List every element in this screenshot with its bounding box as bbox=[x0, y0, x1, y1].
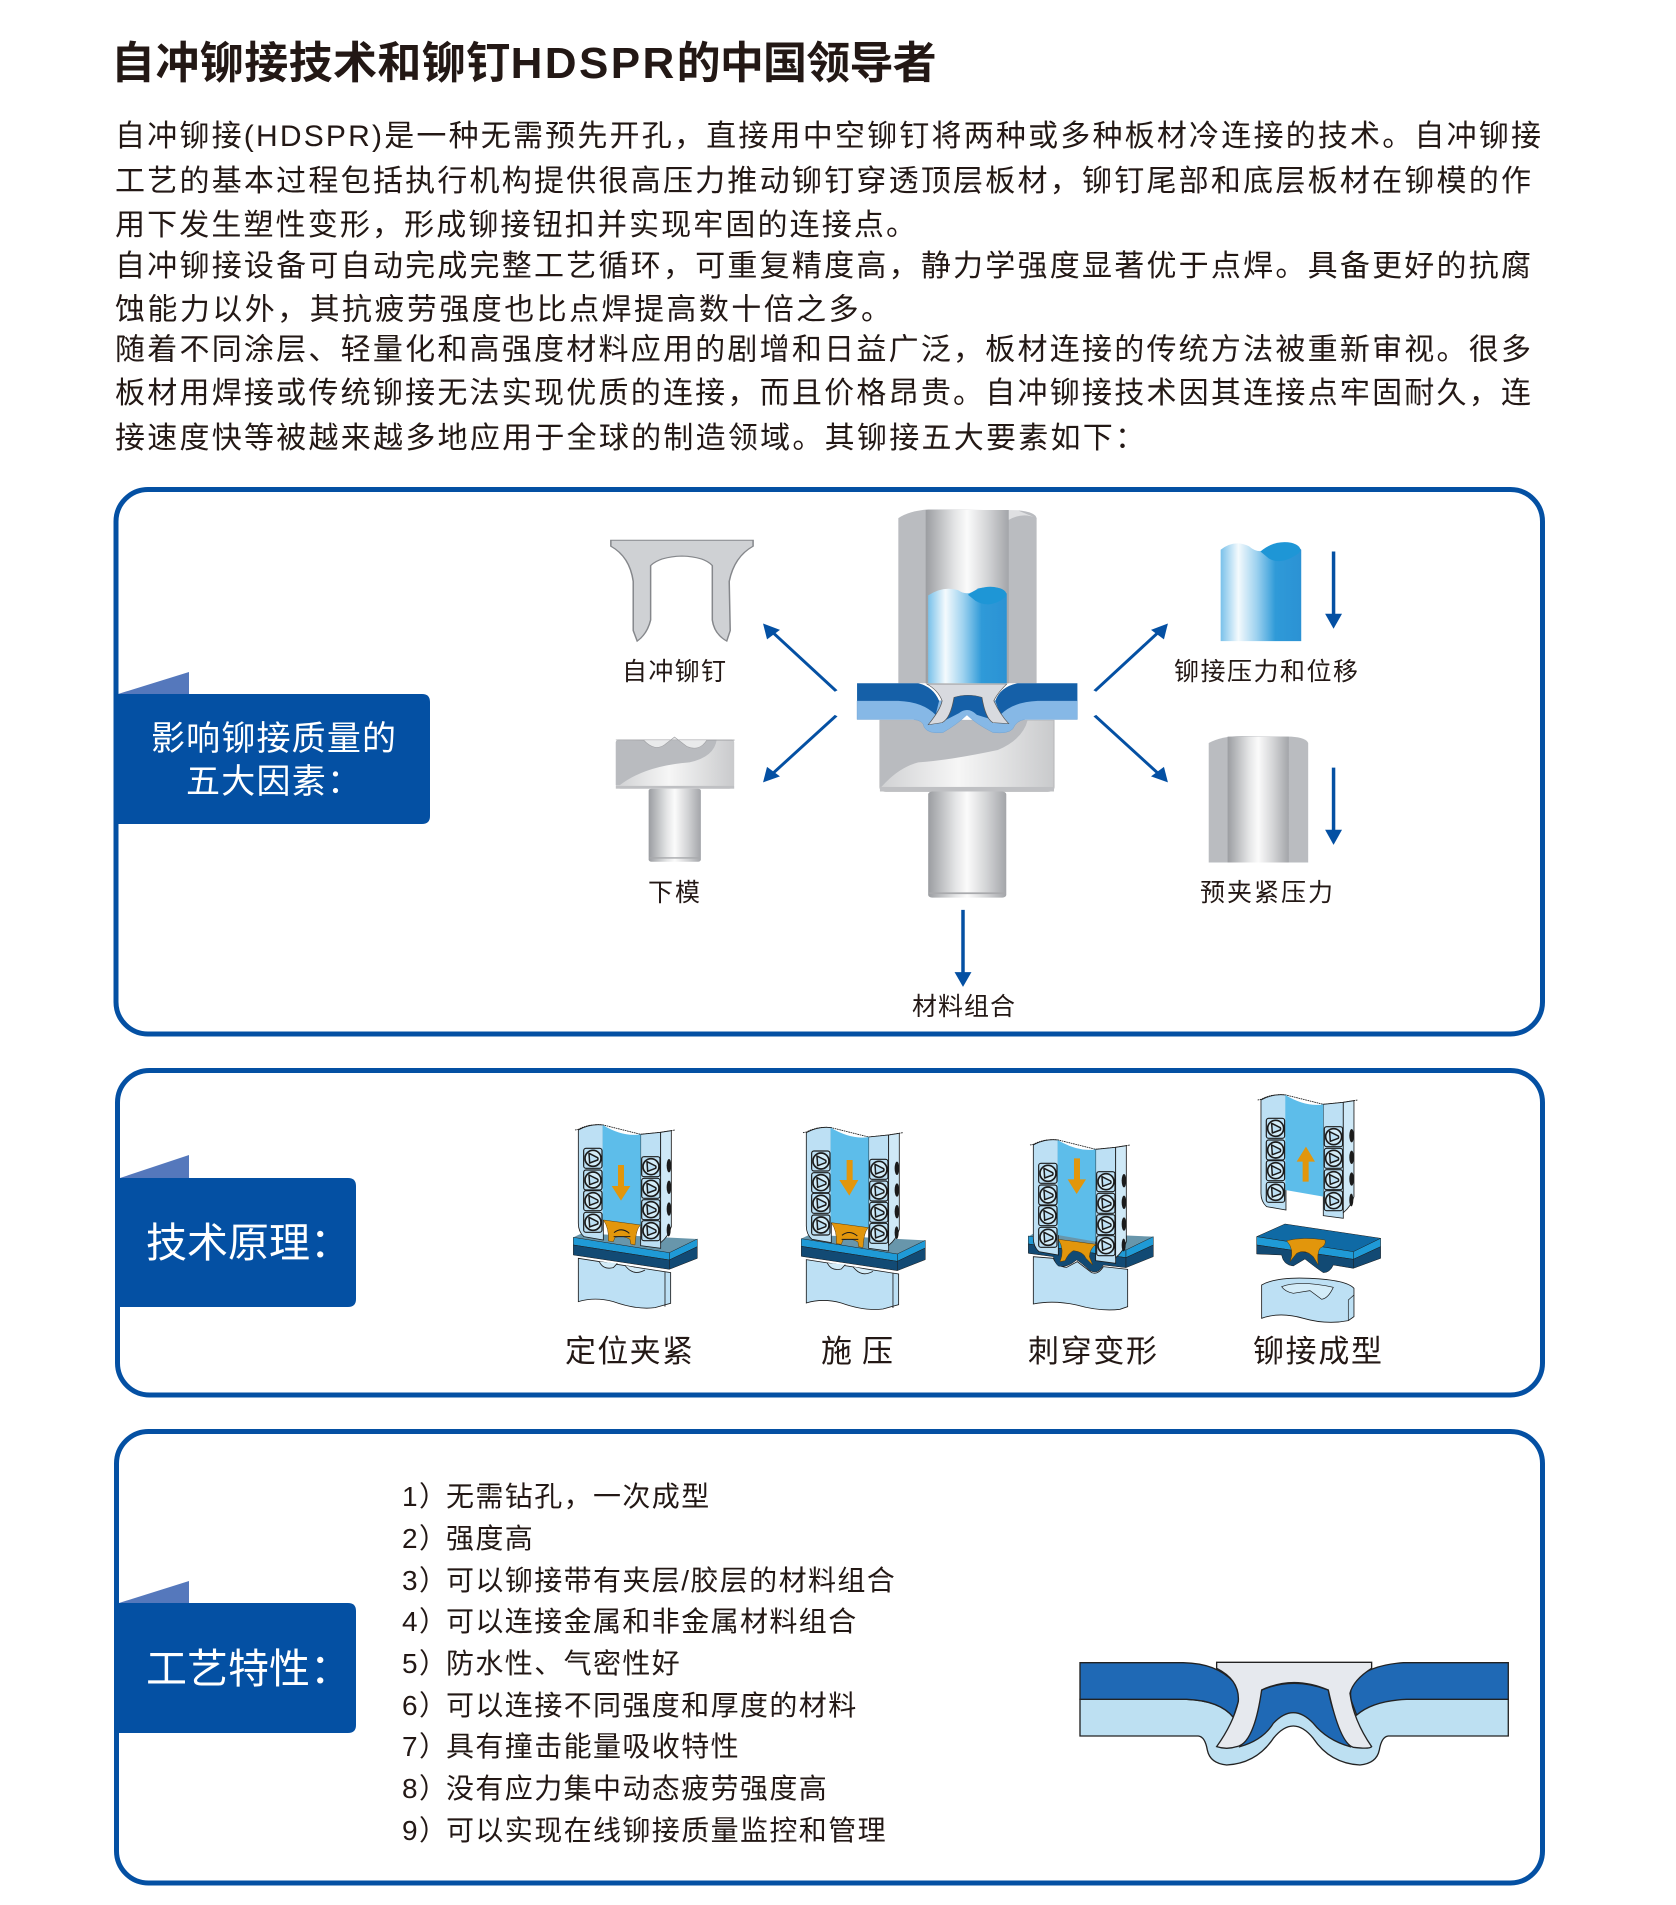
feature list: 4） bbox=[402, 1606, 448, 1637]
feature list: 可以铆接带有夹层/胶层的材料组合 bbox=[446, 1565, 896, 1596]
central riveting diagram bbox=[857, 509, 1077, 898]
icon: lower die bbox=[616, 737, 734, 862]
intro text block: 用下发生塑性变形，形成铆接钮扣并实现牢固的连接点。 bbox=[115, 209, 916, 242]
intro text block: 工艺的基本过程包括执行机构提供很高压力推动铆钉穿透顶层板材，铆钉尾部和底层板材在铆模的作 bbox=[115, 165, 1531, 198]
intro text block: 蚀能力以外，其抗疲劳强度也比点焊提高数十倍之多。 bbox=[115, 294, 891, 326]
intro text block: 接速度快等被越来越多地应用于全球的制造领域。其铆接五大要素如下： bbox=[115, 422, 1145, 455]
title: 自冲铆接技术和铆钉HDSPR的中国领导者 bbox=[111, 39, 936, 88]
feature list: 可以实现在线铆接质量监控和管理 bbox=[446, 1815, 887, 1846]
feature list: 3） bbox=[402, 1565, 448, 1596]
rivet joint cross-section bbox=[1080, 1662, 1508, 1765]
intro text block: 板材用焊接或传统铆接无法实现优质的连接，而且价格昂贵。自冲铆接技术因其连接点牢固耐久，连 bbox=[115, 377, 1531, 410]
icon: clamp tube with force arrow bbox=[1209, 736, 1342, 862]
intro text block: 自冲铆接设备可自动完成完整工艺循环，可重复精度高，静力学强度显著优于点焊。具备更好的抗腐 bbox=[115, 250, 1531, 283]
feature list: 无需钻孔，一次成型 bbox=[446, 1481, 711, 1512]
feature list: 7） bbox=[402, 1731, 448, 1762]
label: stage 3: 刺穿变形 bbox=[1028, 1334, 1157, 1369]
label: stage 4: 铆接成型 bbox=[1253, 1334, 1382, 1369]
feature list: 具有撞击能量吸收特性 bbox=[446, 1731, 740, 1762]
label: stage 1: 定位夹紧 bbox=[565, 1334, 693, 1369]
stage 2: applying pressure bbox=[801, 1127, 925, 1309]
feature list bbox=[402, 1481, 896, 1846]
banner: process characteristics: 工艺特性： bbox=[146, 1646, 351, 1692]
stage 3: piercing and deforming bbox=[1028, 1140, 1153, 1310]
label: stage 2: 施 压 bbox=[821, 1334, 893, 1369]
banner: five factors bbox=[114, 672, 430, 824]
feature list: 强度高 bbox=[446, 1523, 534, 1554]
feature list: 可以连接不同强度和厚度的材料 bbox=[446, 1690, 858, 1721]
feature list: 8） bbox=[402, 1773, 448, 1804]
feature list: 9） bbox=[402, 1815, 448, 1846]
icon: punch with force arrow bbox=[1221, 542, 1342, 641]
feature list: 5） bbox=[402, 1648, 448, 1679]
intro text block bbox=[115, 120, 1541, 455]
feature list: 没有应力集中动态疲劳强度高 bbox=[446, 1773, 828, 1804]
feature list: 6） bbox=[402, 1690, 448, 1721]
intro text block: 随着不同涂层、轻量化和高强度材料应用的剧增和日益广泛，板材连接的传统方法被重新审视。很多 bbox=[115, 334, 1531, 366]
panel: technical principle bbox=[117, 1070, 1542, 1395]
intro text block: 自冲铆接(HDSPR)是一种无需预先开孔，直接用中空铆钉将两种或多种板材冷连接的技术。自冲铆接 bbox=[115, 120, 1541, 153]
banner: five factors: 影响铆接质量的 bbox=[151, 720, 396, 758]
label: force and displacement: 铆接压力和位移 bbox=[1174, 658, 1358, 686]
banner: technical principle: 技术原理： bbox=[146, 1220, 351, 1266]
feature list: 1） bbox=[402, 1481, 448, 1512]
label: clamping force: 预夹紧压力 bbox=[1200, 879, 1333, 907]
banner: process characteristics bbox=[114, 1581, 356, 1733]
arrows radiating from centre bbox=[763, 624, 1168, 987]
stage 1: positioning and clamping bbox=[573, 1125, 697, 1308]
label: rivet: 自冲铆钉 bbox=[622, 658, 726, 686]
feature list: 2） bbox=[402, 1523, 448, 1554]
feature list: 可以连接金属和非金属材料组合 bbox=[446, 1606, 858, 1637]
label: lower die: 下模 bbox=[648, 879, 700, 907]
icon: self-piercing rivet bbox=[611, 540, 753, 641]
stage 4: rivet formed bbox=[1257, 1095, 1381, 1322]
panel: five factors bbox=[114, 490, 1542, 1034]
banner: five factors: 五大因素： bbox=[186, 763, 361, 801]
panel: process characteristics bbox=[114, 1432, 1542, 1883]
label: material combination: 材料组合 bbox=[912, 993, 1015, 1021]
banner: technical principle bbox=[117, 1155, 356, 1307]
feature list: 防水性、气密性好 bbox=[446, 1648, 681, 1679]
